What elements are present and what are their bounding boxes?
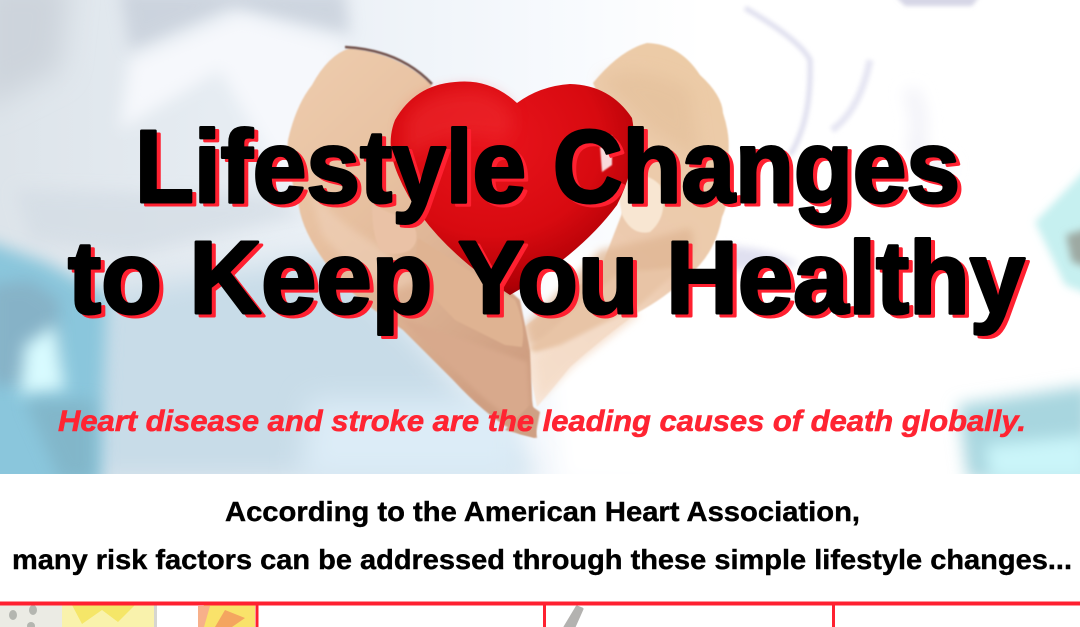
left thumb [374,212,416,254]
intro text: many risk factors can be addressed through these simple lifestyle changes... [12,544,1072,575]
title line 1: Lifestyle Changes [139,112,964,227]
subtitle: Heart disease and stroke are the leading causes of death globally. [58,405,1026,438]
red heart [391,81,634,295]
intro text: According to the American Heart Association, [225,496,860,527]
fingers over heart base [455,271,663,439]
title line 2: to Keep You Healthy [72,223,1029,338]
panel 1 image fragment: fruit [0,605,255,627]
coat shading and blurred clinic backdrop [0,0,1080,490]
title line 2: to Keep You Healthy [68,220,1025,335]
right thumb [617,176,663,233]
bottom panels row [0,602,1080,627]
title line 1: Lifestyle Changes [135,109,960,224]
panel 3 image fragment: grey stroke [565,607,582,627]
photo background: white coat [0,0,556,474]
title [68,109,1029,338]
right hand [520,43,729,407]
hero photo: doctor holding a red heart [0,0,1080,490]
panel borders [0,602,1080,627]
intro text [12,496,1072,575]
left hand [287,47,537,438]
